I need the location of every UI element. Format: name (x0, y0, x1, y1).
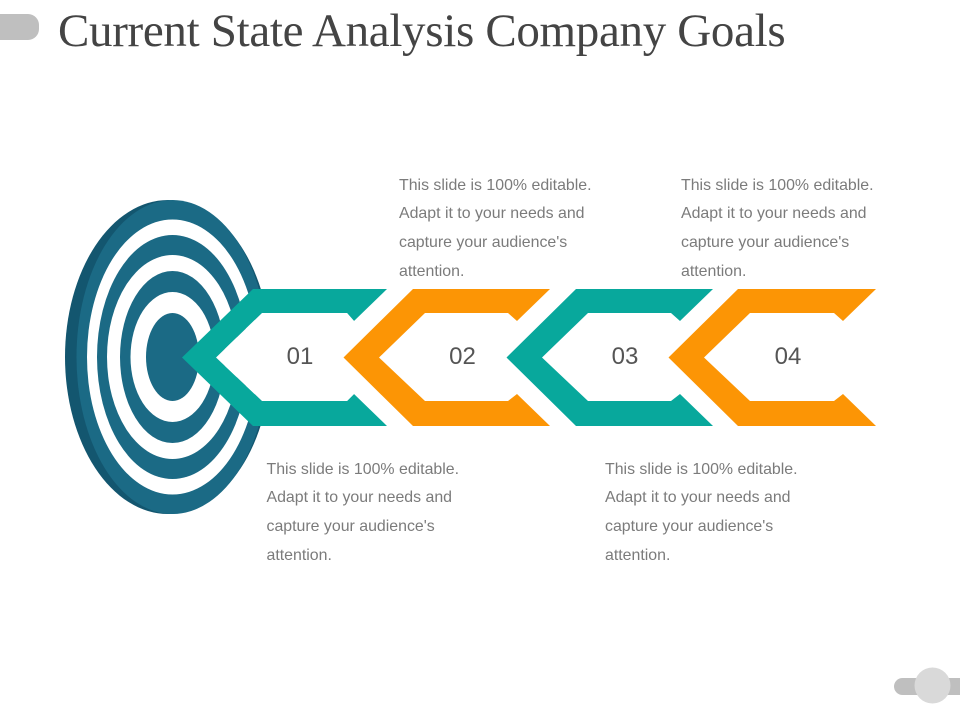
text block bottom 01 (266, 461, 459, 564)
text block bottom 01: attention. (266, 547, 332, 564)
text block top 02 (399, 177, 592, 280)
text block top 04: attention. (681, 263, 746, 280)
number 03: 03 (612, 343, 638, 370)
text block bottom 03 (605, 461, 798, 564)
number 02: 02 (449, 343, 476, 370)
chevron 01 (182, 289, 387, 426)
text block bottom 03: Adapt it to your needs and (605, 489, 791, 506)
text block top 02: capture your audience's (399, 234, 567, 251)
text block top 02: attention. (399, 263, 464, 280)
text block top 02: This slide is 100% editable. (399, 177, 592, 194)
text block bottom 03: capture your audience's (605, 518, 773, 535)
chevron 04 (668, 289, 876, 426)
text block bottom 03: attention. (605, 547, 670, 564)
number 01: 01 (287, 343, 313, 370)
text block top 02: Adapt it to your needs and (399, 205, 585, 222)
text block bottom 03: This slide is 100% editable. (605, 461, 798, 478)
text block top 04: This slide is 100% editable. (681, 177, 874, 194)
target icon (65, 200, 271, 514)
text block top 04: capture your audience's (681, 234, 849, 251)
text block bottom 01: Adapt it to your needs and (266, 489, 452, 506)
text block top 04: Adapt it to your needs and (681, 205, 867, 222)
number 04: 04 (775, 343, 801, 370)
text block top 04 (681, 177, 874, 280)
chevron 02 (344, 289, 550, 426)
slide control bottom right (894, 668, 960, 704)
text block bottom 01: capture your audience's (266, 518, 435, 535)
decorative tab top left (0, 14, 39, 40)
text block bottom 01: This slide is 100% editable. (266, 461, 459, 478)
title: Current State Analysis Company Goals (58, 5, 785, 57)
chevron 03 (506, 289, 713, 426)
